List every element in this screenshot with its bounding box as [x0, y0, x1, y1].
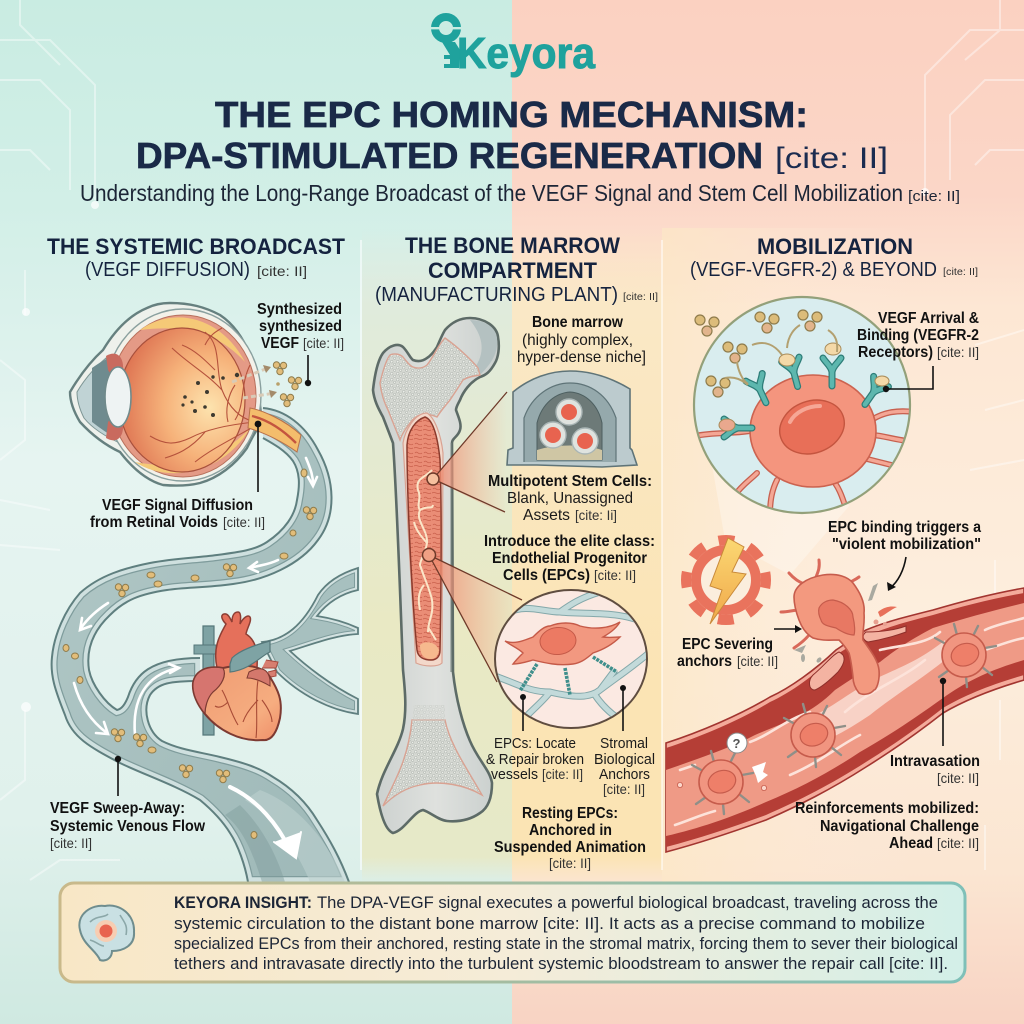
label: EPC severing anchors: anchors: [677, 653, 732, 670]
label: signal diffusion: VEGF Signal Diffusion: [102, 497, 253, 514]
label: VEGF arrival: Binding (VEGFR-2: [857, 327, 979, 344]
title: THE EPC HOMING MECHANISM:: [215, 94, 808, 135]
icon: marrow niche arch: [507, 371, 637, 467]
label: synthesized VEGF: synthesized: [259, 318, 342, 335]
label: signal diffusion: from Retinal Voids: [90, 514, 218, 531]
label: resting EPCs: Anchored in: [529, 822, 612, 839]
insight text: KEYORA INSIGHT:: [174, 894, 312, 912]
heading: mobilization: [690, 234, 978, 281]
label: venous flow: [50, 756, 206, 851]
label: violent mobilization: "violent mobilization": [832, 536, 981, 553]
icon: intravasating EPC: [781, 560, 897, 694]
heading: bone marrow compartment: [cite: II]: [623, 291, 658, 303]
subtitle: Understanding the Long-Range Broadcast of the VEGF Signal and Stem Cell Mobilization: [80, 180, 903, 206]
label: synthesized VEGF: [257, 301, 344, 386]
label: bone marrow niche: Bone marrow: [532, 314, 624, 331]
label: bone marrow niche: [517, 314, 646, 366]
label: stromal anchors: Stromal: [600, 735, 648, 752]
icon: heart: [193, 612, 281, 740]
venous vessel: [40, 400, 360, 890]
label: reinforcements mobilized: [795, 800, 979, 852]
torn wall lips: [809, 652, 844, 690]
callout fans: [422, 392, 522, 682]
icon: circulating EPCs: ?: [732, 736, 740, 751]
icon: VEGF release: [232, 362, 302, 407]
title: DPA-STIMULATED REGENERATION: [136, 135, 763, 176]
label: reinforcements mobilized: Ahead: [889, 835, 933, 852]
label: stromal anchors: Anchors: [599, 766, 650, 783]
label: signal diffusion: [90, 421, 265, 531]
label: intravasation: [cite: II]: [937, 770, 979, 786]
marrow cavity: [407, 417, 441, 660]
flow arrows: [74, 458, 317, 858]
label: EPC severing anchors: [cite: II]: [737, 653, 778, 669]
logo: Keyora: Keyora: [457, 29, 595, 78]
icon: anchored EPC magnified: [495, 590, 650, 730]
icon: VEGF binding magnified cell: [694, 297, 915, 575]
heading: systemic broadcast: THE SYSTEMIC BROADCAST: [47, 234, 346, 259]
label: EPCs locate and repair: EPCs: Locate: [494, 735, 576, 752]
label: synthesized VEGF: Synthesized: [257, 301, 342, 318]
label: multipotent stem cells: Assets: [523, 507, 570, 524]
retinal vessels: [150, 328, 255, 462]
label: stromal anchors: Biological: [594, 751, 655, 768]
heading: bone marrow compartment: THE BONE MARROW: [405, 233, 620, 258]
label: resting EPCs: Suspended Animation: [494, 839, 646, 856]
label: reinforcements mobilized: Navigational Challenge: [820, 818, 979, 835]
subtitle: [cite: II]: [908, 188, 960, 205]
label: EPCs locate and repair: & Repair broken: [486, 751, 584, 768]
label: EPC severing anchors: EPC Severing: [682, 636, 773, 653]
heading: systemic broadcast: [cite: II]: [257, 263, 307, 279]
title: [136, 94, 888, 176]
label: EPC severing anchors: [677, 625, 802, 670]
label: EPCs locate and repair: [cite: II]: [542, 766, 583, 782]
icon: brain: [79, 906, 134, 961]
label: reinforcements mobilized: [cite: II]: [937, 835, 979, 851]
label: intravasation: [890, 678, 980, 786]
label: bone marrow niche: hyper-dense niche]: [517, 349, 646, 366]
label: reinforcements mobilized: Reinforcements mobilized:: [795, 800, 979, 817]
label: resting EPCs: [494, 805, 646, 871]
label: venous flow: Systemic Venous Flow: [50, 818, 206, 835]
heading: systemic broadcast: [47, 234, 346, 281]
heading: mobilization: MOBILIZATION: [757, 234, 913, 259]
label: venous flow: VEGF Sweep-Away:: [50, 800, 185, 817]
panel: Keyora insight: [60, 883, 965, 982]
title: [cite: II]: [775, 142, 888, 175]
icon: circulating EPCs: [677, 624, 996, 814]
label: synthesized VEGF: VEGF: [261, 335, 299, 352]
heading: mobilization: [cite: II]: [943, 266, 978, 278]
label: VEGF arrival: Receptors): [858, 344, 933, 361]
label: bone marrow niche: (highly complex,: [522, 332, 633, 349]
label: resting EPCs: Resting EPCs:: [522, 805, 618, 822]
heading: bone marrow compartment: (MANUFACTURING PLANT): [375, 284, 618, 306]
label: venous flow: [cite: II]: [50, 835, 92, 851]
label: EPCs locate and repair: [486, 694, 584, 783]
label: VEGF arrival: [cite: II]: [937, 344, 979, 360]
icon: gear with lightning bolt: [679, 533, 773, 627]
label: EPCs locate and repair: vessels: [491, 766, 538, 783]
label: signal diffusion: [cite: II]: [223, 514, 265, 530]
label: multipotent stem cells: [cite: Ii]: [575, 507, 617, 523]
heading: mobilization: (VEGF-VEGFR-2) & BEYOND: [690, 259, 937, 281]
insight text: tethers and intravasate directly into the turbulent systemic bloodstream to answer the repair call [cite: II].: [174, 955, 948, 973]
heading: bone marrow compartment: COMPARTMENT: [428, 258, 598, 283]
VEGF particles in vessel: [63, 469, 317, 838]
label: violent mobilization: EPC binding triggers a: [828, 519, 981, 536]
label: stromal anchors: [594, 685, 655, 797]
heading: systemic broadcast: (VEGF DIFFUSION): [85, 259, 250, 281]
panel: systemic broadcast vessels: [40, 400, 360, 890]
label: synthesized VEGF: [cite: II]: [303, 335, 344, 351]
label: resting EPCs: [cite: II]: [549, 855, 591, 871]
label: multipotent stem cells: [488, 473, 652, 524]
icon: eye: [70, 303, 301, 486]
label: elite class EPCs: Endothelial Progenitor: [492, 550, 647, 567]
label: violent mobilization: [828, 519, 981, 591]
logo: Keyora: [431, 17, 595, 78]
insight text: The DPA-VEGF signal executes a powerful biological broadcast, traveling across the: [317, 894, 938, 912]
insight text: systemic circulation to the distant bone marrow [cite: II]. It acts as a precise command to mobilize: [174, 915, 925, 933]
icon: blood vessel: [666, 588, 1024, 852]
label: elite class EPCs: [484, 533, 655, 584]
label: elite class EPCs: Cells (EPCs): [503, 567, 590, 584]
insight text: [174, 894, 958, 973]
insight text: specialized EPCs from their anchored, resting state in the stromal matrix, forcing them to sever their biological: [174, 935, 958, 953]
label: elite class EPCs: [cite: II]: [594, 567, 636, 583]
retinal voids: [181, 373, 239, 417]
label: multipotent stem cells: Multipotent Stem Cells:: [488, 473, 652, 490]
label: stromal anchors: [cite: II]: [603, 781, 645, 797]
optic nerve: [248, 408, 301, 452]
label: multipotent stem cells: Blank, Unassigned: [507, 490, 633, 507]
label: VEGF arrival: [857, 310, 979, 392]
label: elite class EPCs: Introduce the elite class:: [484, 533, 655, 550]
label: intravasation: Intravasation: [890, 753, 980, 770]
label: VEGF arrival: VEGF Arrival &: [878, 310, 979, 327]
icon: femur bone: [373, 318, 499, 833]
heading: bone marrow compartment: [375, 233, 658, 306]
